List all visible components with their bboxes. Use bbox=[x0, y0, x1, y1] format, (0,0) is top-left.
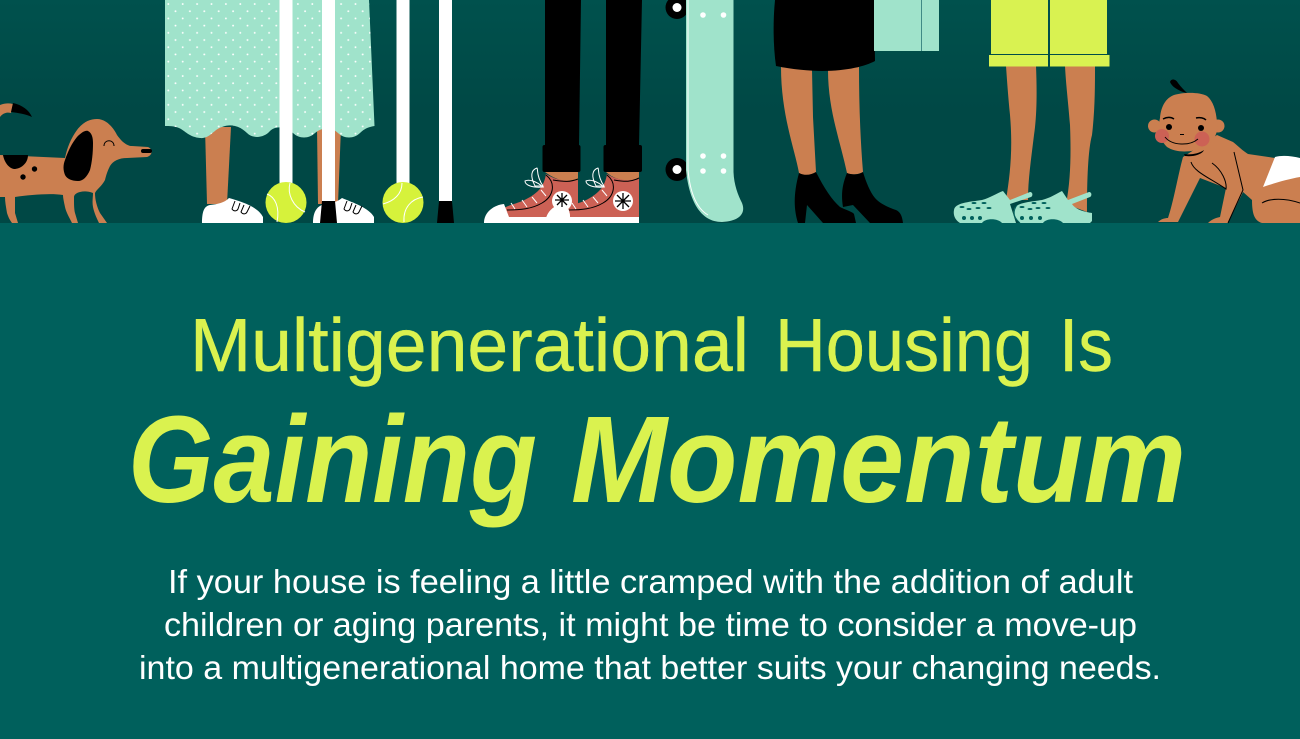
heading line 1 bbox=[190, 303, 1113, 387]
illustration: dog bbox=[0, 103, 152, 223]
illustration: grandmother dress and legs bbox=[165, 0, 374, 223]
top illustration band background bbox=[0, 0, 1300, 223]
heading line 1: Housing bbox=[775, 303, 1033, 387]
heading line 1: Is bbox=[1059, 303, 1113, 387]
illustration: crawling baby bbox=[1148, 79, 1300, 223]
illustration: teen legs and sneakers bbox=[484, 0, 642, 223]
illustration: woman in skirt and heels bbox=[774, 0, 939, 223]
bottom panel background bbox=[0, 223, 1300, 739]
heading line 1: Multigenerational bbox=[190, 303, 749, 387]
illustration: walker with tennis balls bbox=[266, 0, 454, 223]
intro paragraph: If your house is feeling a little cramped with the addition of adult bbox=[168, 563, 1133, 600]
illustration: shopping bag bbox=[874, 0, 939, 51]
illustration: skateboard bbox=[666, 0, 743, 222]
intro paragraph bbox=[139, 563, 1161, 686]
illustration: man in shorts and clogs bbox=[954, 0, 1110, 223]
heading line 2: Gaining bbox=[128, 391, 537, 529]
intro paragraph: into a multigenerational home that better suits your changing needs. bbox=[139, 649, 1161, 686]
intro paragraph: children or aging parents, it might be time to consider a move-up bbox=[164, 606, 1137, 643]
heading line 2 bbox=[128, 391, 1186, 529]
heading line 2: Momentum bbox=[571, 391, 1186, 529]
